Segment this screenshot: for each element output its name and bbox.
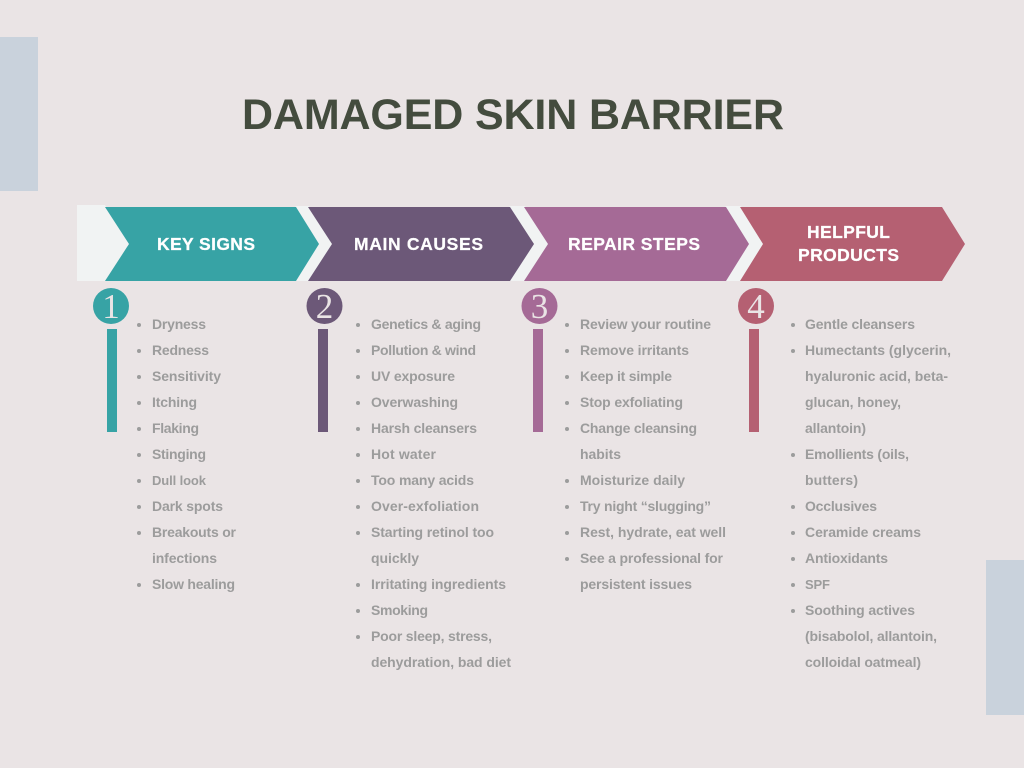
list: helpful products: Humectants (glycerin, [805, 342, 951, 358]
list: main causes: Too many acids [371, 472, 474, 488]
list: main causes: Pollution & wind [371, 342, 476, 358]
arrow: repair steps: REPAIR STEPS [568, 234, 700, 254]
list: repair steps: Keep it simple [580, 368, 672, 384]
arrow: key signs [105, 207, 319, 281]
list: repair steps: Try night “slugging” [580, 498, 711, 514]
list: key signs: Dark spots [152, 498, 223, 514]
list: helpful products: SPF [805, 577, 830, 592]
list: main causes: Harsh cleansers [371, 420, 477, 436]
decorative block: top left [0, 37, 38, 191]
marker 2 [306, 287, 342, 432]
list: main causes: UV exposure [371, 368, 455, 384]
list: key signs: Dryness [152, 316, 206, 332]
list: key signs: Slow healing [152, 576, 235, 592]
list: helpful products: colloidal oatmeal) [805, 654, 921, 670]
marker 3: 3 [531, 287, 548, 326]
list: repair steps: Remove irritants [580, 342, 689, 358]
list: repair steps: Rest, hydrate, eat well [580, 524, 726, 540]
marker 2: 2 [316, 287, 333, 326]
arrow: helpful products: PRODUCTS [798, 245, 899, 265]
list: helpful products: hyaluronic acid, beta- [805, 368, 948, 384]
list: helpful products: Antioxidants [805, 550, 888, 566]
list: helpful products [791, 316, 951, 670]
list: helpful products: Ceramide creams [805, 524, 921, 540]
list: key signs: infections [152, 550, 217, 566]
list: main causes: Genetics & aging [371, 316, 481, 332]
list: repair steps: Review your routine [580, 316, 711, 332]
list: repair steps [565, 316, 726, 592]
arrow: main causes: MAIN CAUSES [354, 234, 483, 254]
list: helpful products: Gentle cleansers [805, 316, 915, 332]
list: helpful products: Occlusives [805, 498, 877, 514]
list: helpful products: (bisabolol, allantoin, [805, 628, 937, 644]
list: main causes: dehydration, bad diet [371, 654, 511, 670]
list: repair steps: Stop exfoliating [580, 394, 683, 410]
list: key signs: Itching [152, 394, 197, 410]
list: main causes: Poor sleep, stress, [371, 628, 492, 644]
list: main causes: quickly [371, 550, 419, 566]
arrow band: white backing [77, 205, 129, 281]
marker 1 [93, 287, 129, 432]
marker 3 [522, 287, 558, 432]
decorative block: bottom right [986, 560, 1024, 715]
marker 4 [738, 287, 774, 432]
list: main causes: Over-exfoliation [371, 498, 479, 514]
list: key signs: Dull look [152, 473, 207, 488]
arrow: helpful products [740, 207, 965, 281]
list: repair steps: See a professional for [580, 550, 724, 566]
list: main causes [356, 316, 511, 670]
arrow: main causes [308, 207, 534, 281]
arrow: helpful products: HELPFUL [807, 222, 890, 242]
arrow separators [295, 206, 764, 281]
list: key signs: Flaking [152, 420, 199, 436]
list: helpful products: glucan, honey, [805, 394, 901, 410]
list: key signs: Breakouts or [152, 524, 237, 540]
list: repair steps: Change cleansing [580, 420, 697, 436]
list: main causes: Irritating ingredients [371, 576, 506, 592]
list: main causes: Overwashing [371, 394, 458, 410]
arrow: key signs: KEY SIGNS [157, 234, 255, 254]
list: main causes: Starting retinol too [371, 524, 494, 540]
list: main causes: Smoking [371, 602, 428, 618]
list: key signs: Sensitivity [152, 368, 221, 384]
title: DAMAGED SKIN BARRIER [242, 91, 784, 139]
list: key signs [137, 316, 237, 592]
list: helpful products: butters) [805, 472, 858, 488]
list: repair steps: Moisturize daily [580, 472, 685, 488]
list: helpful products: Emollients (oils, [805, 446, 909, 462]
marker 1: 1 [102, 287, 120, 326]
list: helpful products: Soothing actives [805, 602, 915, 618]
list: key signs: Redness [152, 342, 209, 358]
list: repair steps: habits [580, 446, 621, 462]
list: helpful products: allantoin) [805, 420, 866, 436]
arrow: repair steps [524, 207, 749, 281]
marker 4: 4 [747, 287, 765, 326]
list: repair steps: persistent issues [580, 576, 692, 592]
list: main causes: Hot water [371, 446, 437, 462]
list: key signs: Stinging [152, 446, 206, 462]
